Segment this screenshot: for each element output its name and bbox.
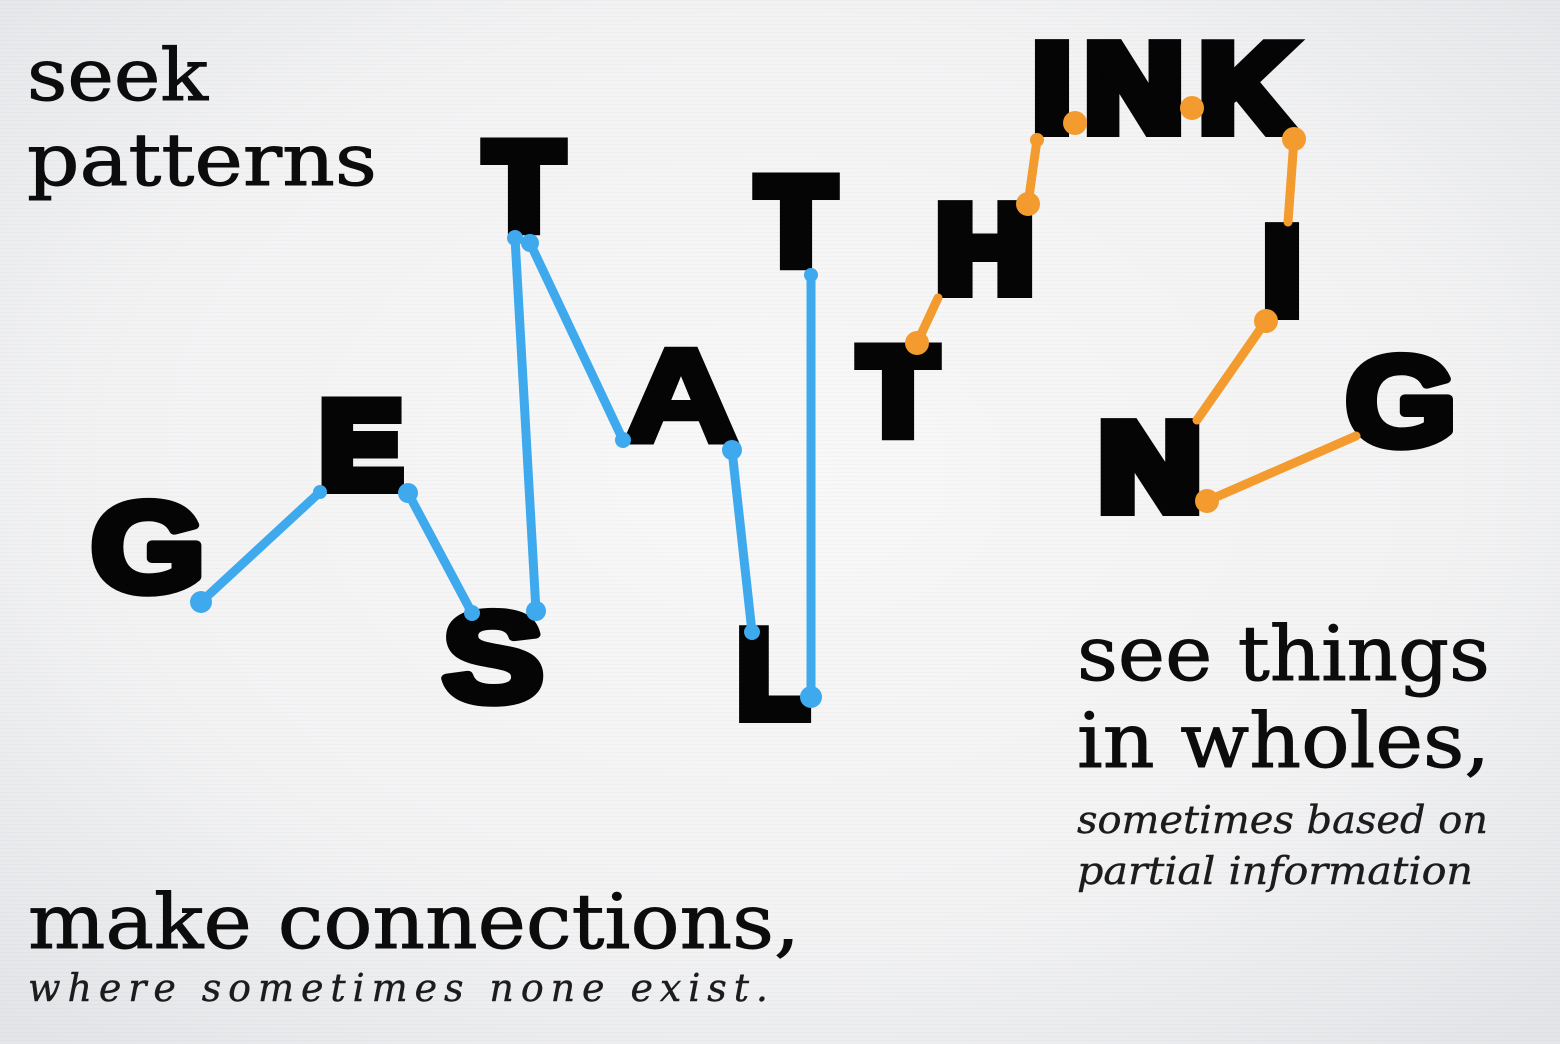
word: GESTALT letters: G: [91, 476, 205, 619]
text: see things in wholes: see things: [1077, 609, 1490, 698]
text: sometimes based on partial information: [1077, 798, 1488, 893]
text: seek patterns: [27, 33, 377, 202]
word: THINKING letters: G: [1345, 330, 1457, 472]
word: THINKING letters: H: [937, 182, 1033, 318]
word: THINKING letters: N: [1099, 399, 1201, 535]
text: seek patterns: patterns: [27, 118, 377, 202]
word: GESTALT letters: E: [320, 377, 402, 513]
word: THINKING letters: K: [1200, 20, 1292, 156]
text: sometimes based on partial information: partial information: [1077, 849, 1473, 893]
text: make connections: make connections,: [28, 877, 800, 966]
word: GESTALT letters: T: [486, 118, 562, 255]
text: where sometimes none exist: where sometimes none exist.: [28, 966, 768, 1010]
connector: orange line through THINKING: [905, 96, 1356, 513]
text: see things in wholes: [1077, 609, 1490, 785]
word: THINKING letters: I: [1264, 203, 1300, 339]
text: sometimes based on partial information: sometimes based on: [1077, 798, 1488, 842]
connector: blue line through GESTALT: [190, 230, 822, 708]
word: THINKING letters: I: [1034, 20, 1070, 156]
text: see things in wholes: in wholes,: [1077, 696, 1490, 785]
word: THINKING letters: T: [860, 323, 936, 460]
word: GESTALT letters: L: [738, 607, 808, 743]
text: seek patterns: seek: [27, 33, 209, 117]
word: GESTALT letters: A: [624, 321, 738, 469]
word: THINKING letters: N: [1086, 21, 1182, 157]
word: GESTALT letters: [91, 118, 834, 743]
word: GESTALT letters: S: [442, 586, 544, 728]
word: THINKING letters: [860, 20, 1457, 535]
word: GESTALT letters: T: [758, 153, 834, 290]
